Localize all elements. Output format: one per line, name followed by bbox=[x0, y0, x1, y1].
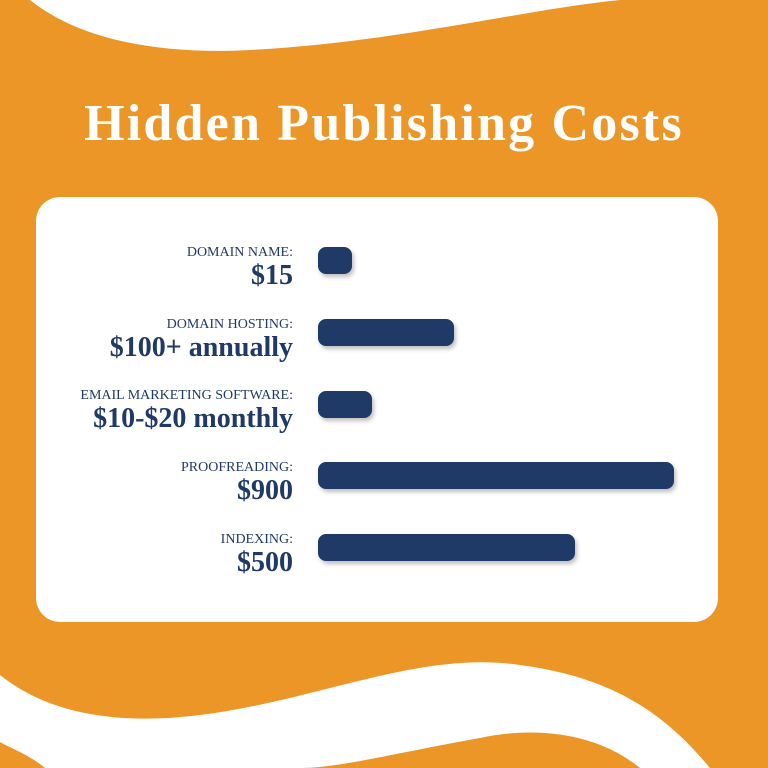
label: indexing: $500 bbox=[237, 547, 293, 578]
bar: proofreading bbox=[318, 462, 674, 489]
label: domain name: DOMAIN NAME: bbox=[187, 245, 293, 260]
bar: indexing bbox=[318, 534, 575, 561]
label: proofreading: PROOFREADING: bbox=[181, 460, 293, 475]
label: indexing bbox=[221, 532, 293, 578]
panel: chart card bbox=[36, 197, 718, 622]
label: email marketing: EMAIL MARKETING SOFTWARE: bbox=[80, 388, 293, 403]
label: domain name bbox=[187, 245, 293, 291]
label: domain hosting: $100+ annually bbox=[110, 332, 293, 363]
bar: domain hosting bbox=[318, 319, 454, 346]
label: proofreading: $900 bbox=[237, 475, 293, 506]
label: domain name: $15 bbox=[251, 260, 293, 291]
label: email marketing: $10-$20 monthly bbox=[93, 403, 293, 434]
label: domain hosting bbox=[110, 317, 293, 363]
label: proofreading bbox=[181, 460, 293, 506]
bar: email marketing bbox=[318, 391, 372, 418]
bar: domain name bbox=[318, 247, 352, 274]
title: Hidden Publishing Costs bbox=[84, 95, 684, 152]
label: email marketing bbox=[80, 388, 293, 434]
label: indexing: INDEXING: bbox=[221, 532, 293, 547]
label: domain hosting: DOMAIN HOSTING: bbox=[167, 317, 293, 332]
